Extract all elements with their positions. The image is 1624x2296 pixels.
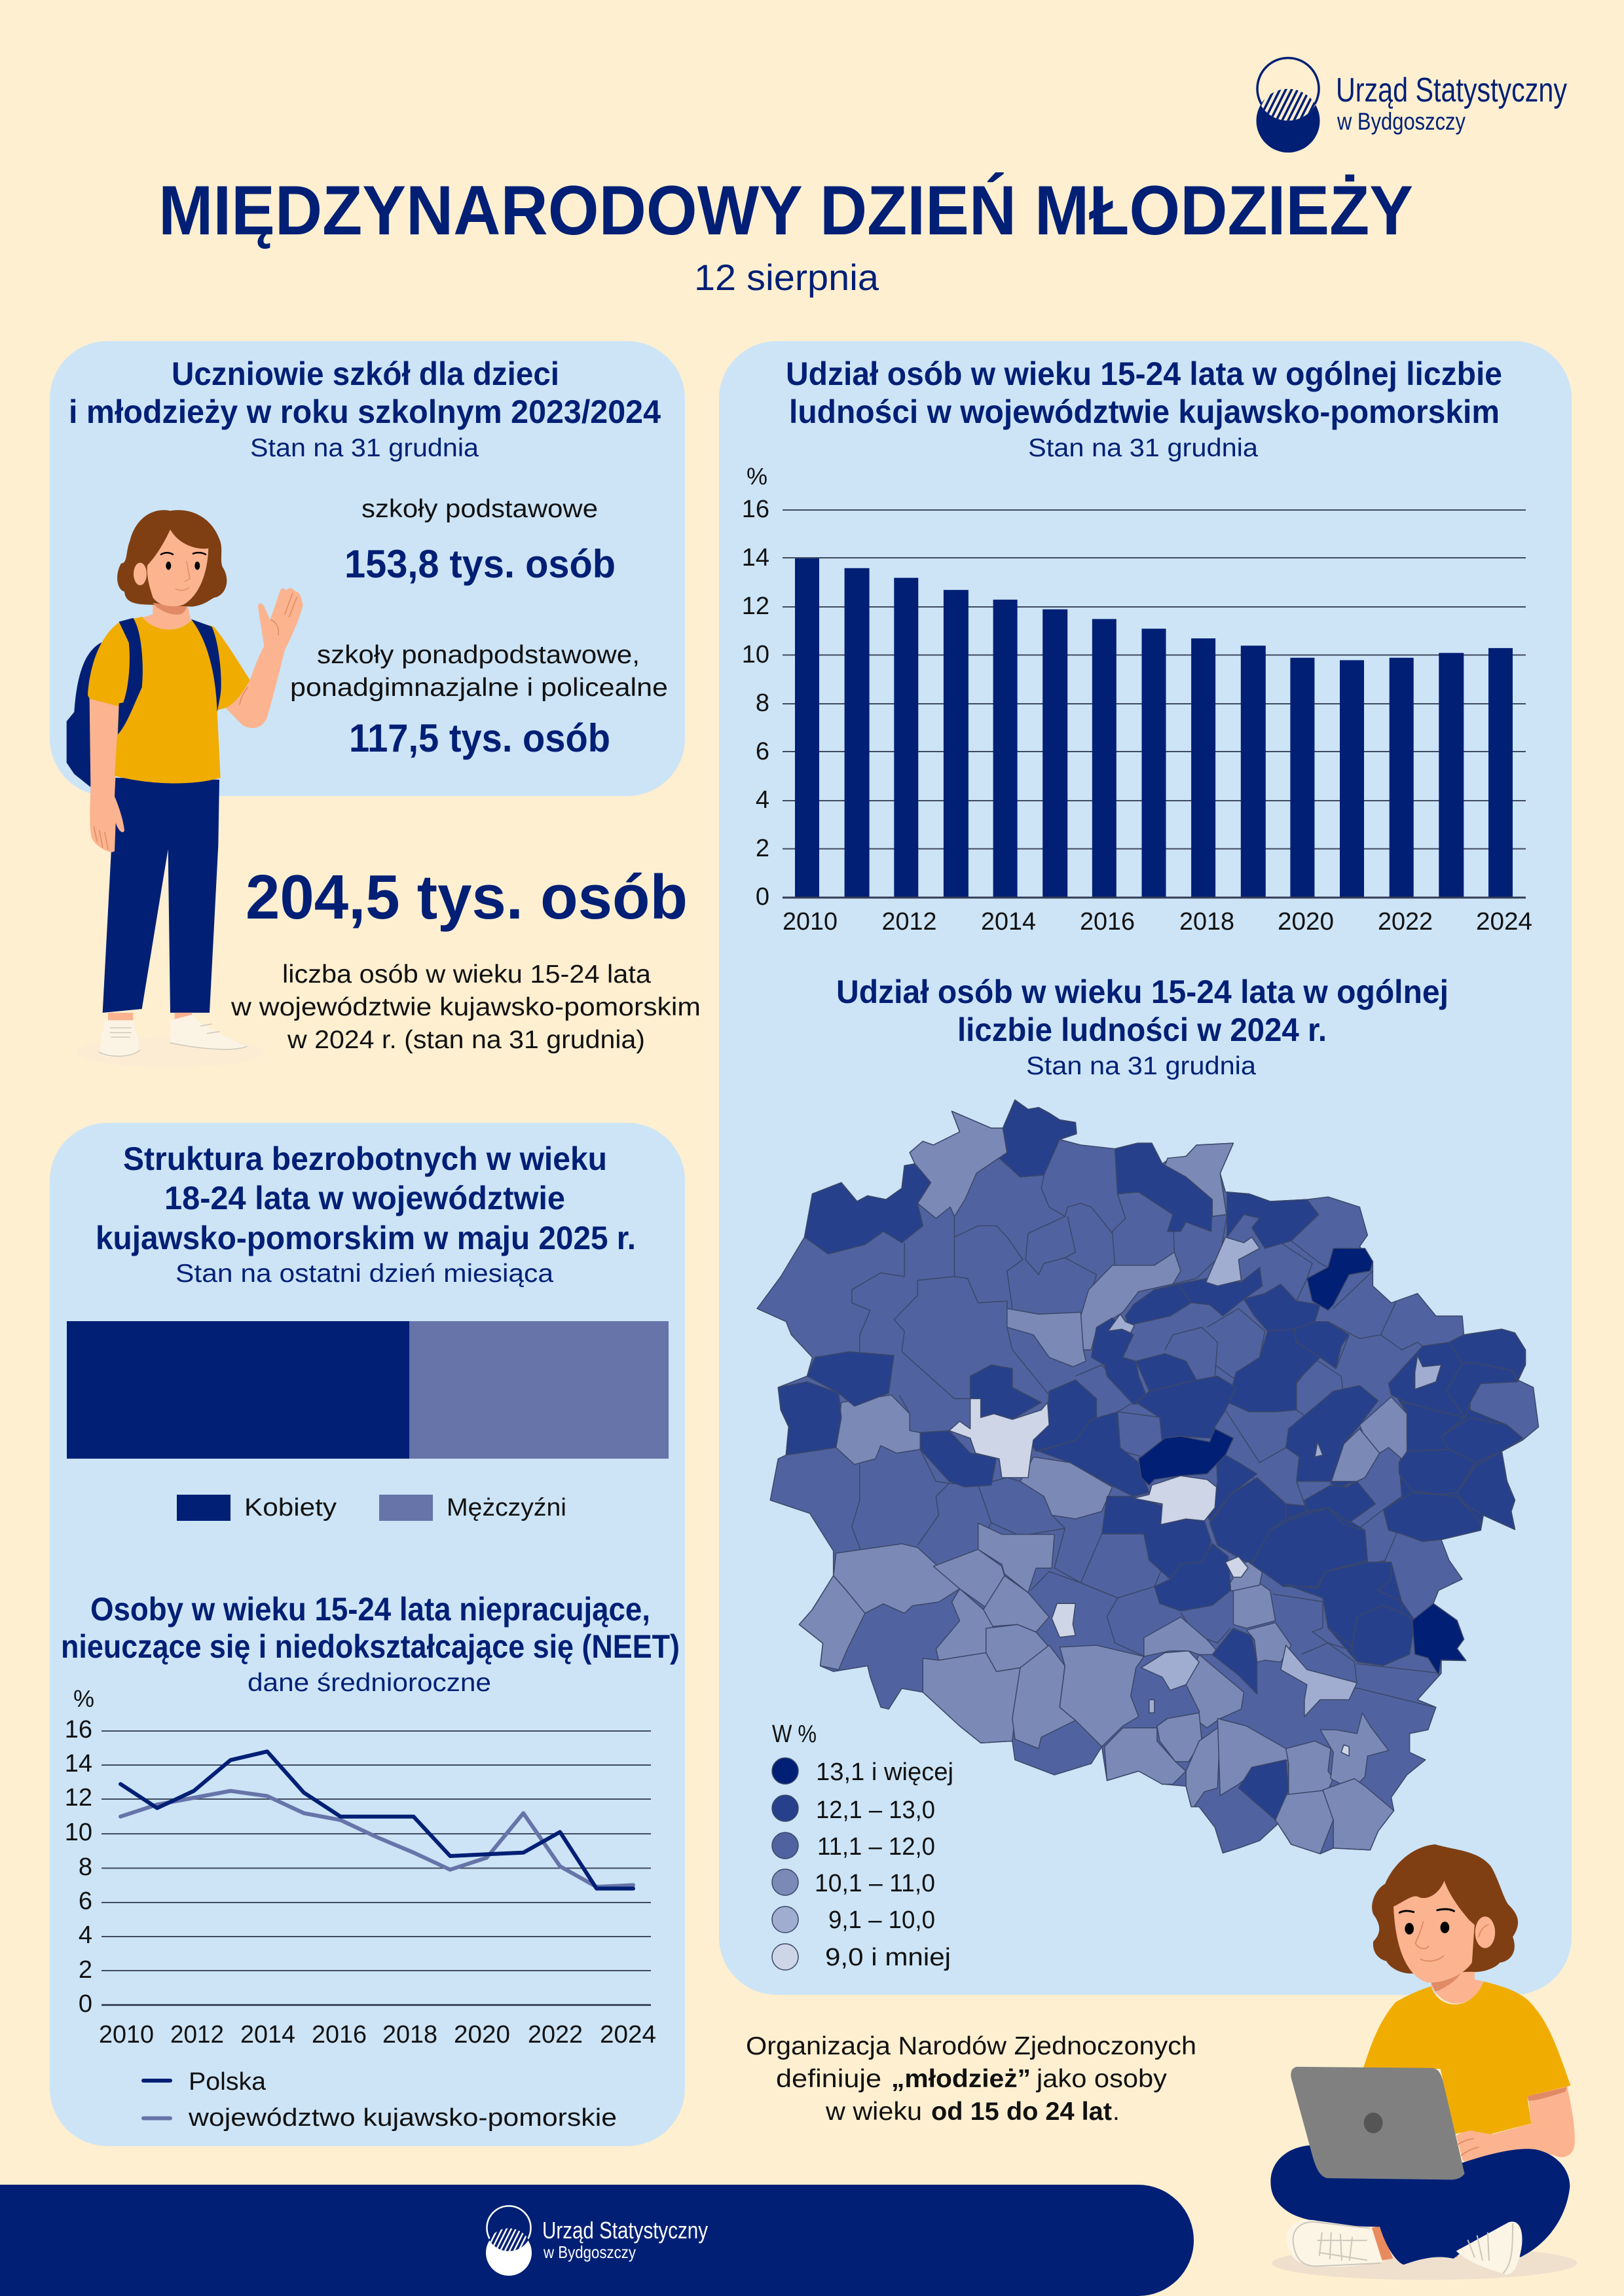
note: pupils date: Stan na 31 grudnia <box>250 434 479 462</box>
illustration: person with laptop <box>1270 1844 1578 2280</box>
bar chart: share of youth 2010-2024: 14 <box>742 544 769 572</box>
line chart: NEET: 2014 <box>240 2021 295 2049</box>
text: population description: liczba osób w wieku 15-24 lata <box>282 960 651 989</box>
text: UN definition of youth: . <box>1113 2098 1120 2126</box>
legend: NEET lines: województwo kujawsko-pomorskie <box>188 2104 617 2132</box>
heading: NEET: nieuczące się i niedokształcające się (NEET) <box>61 1628 680 1665</box>
legend: map classes: 9,0 i mniej <box>825 1944 951 1971</box>
line chart: NEET: 2012 <box>170 2021 224 2049</box>
heading: map: Udział osób w wieku 15-24 lata w ogólnej <box>836 974 1449 1010</box>
text: UN definition of youth: od 15 do 24 lat <box>931 2098 1112 2126</box>
text: UN definition of youth: „młodzież” <box>891 2065 1031 2093</box>
note: chart date: Stan na 31 grudnia <box>1028 434 1258 462</box>
bar chart: share of youth 2010-2024: 10 <box>742 641 769 668</box>
text: UN definition of youth: w wieku <box>825 2098 922 2126</box>
line chart: NEET: 2018 <box>382 2021 437 2049</box>
bar chart: share of youth 2010-2024: 8 <box>756 689 769 717</box>
bar chart: share of youth 2010-2024: % <box>747 463 767 490</box>
label: secondary schools <box>290 641 668 702</box>
logo: Urząd Statystyczny w Bydgoszczy <box>1242 58 1567 153</box>
heading: unemployment structure: 18-24 lata w województwie <box>164 1180 565 1216</box>
heading: unemployment structure: Struktura bezrobotnych w wieku <box>123 1140 607 1177</box>
bar chart: share of youth 2010-2024: 16 <box>742 496 769 523</box>
heading: pupils <box>69 355 661 430</box>
line chart: NEET: 8 <box>79 1853 92 1881</box>
bar chart: share of youth 2010-2024: 2018 <box>1179 908 1234 936</box>
big number: population aged 15-24: 204,5 tys. osób <box>246 862 688 932</box>
footer logo: w Bydgoszczy <box>543 2242 636 2262</box>
panel: unemployment and NEET <box>50 1123 685 2146</box>
line chart: NEET: 14 <box>65 1750 92 1777</box>
footer logo: Urząd Statystyczny <box>542 2217 708 2244</box>
legend: map classes: 13,1 i więcej <box>816 1758 953 1786</box>
heading: share of youth over time: Udział osób w wieku 15-24 lata w ogólnej liczbie <box>786 355 1502 392</box>
legend: NEET lines <box>143 2068 617 2132</box>
note: NEET data: dane średnioroczne <box>248 1669 491 1697</box>
legend: women and men: Mężczyźni <box>447 1494 566 1522</box>
panel: right column <box>719 341 1572 1995</box>
stacked bar: women and men <box>67 1321 669 1459</box>
line chart: NEET: 2010 <box>99 2021 154 2049</box>
bar chart: share of youth 2010-2024 <box>742 463 1532 936</box>
heading: share of youth over time: ludności w województwie kujawsko-pomorskim <box>789 393 1500 430</box>
line chart: NEET <box>65 1685 656 2049</box>
heading: unemployment structure: kujawsko-pomorskim w maju 2025 r. <box>96 1220 636 1256</box>
line chart: NEET: 4 <box>79 1922 92 1949</box>
heading: NEET: Osoby w wieku 15-24 lata niepracujące, <box>90 1591 650 1628</box>
heading: NEET <box>61 1591 680 1665</box>
footer logo <box>473 2206 708 2276</box>
label: secondary schools: szkoły ponadpodstawowe, <box>317 641 640 669</box>
bar chart: share of youth 2010-2024: 6 <box>756 738 769 765</box>
bar chart: share of youth 2010-2024: 2016 <box>1080 908 1135 936</box>
bar chart: share of youth 2010-2024: 2012 <box>881 908 936 936</box>
bar chart: share of youth 2010-2024: 0 <box>756 883 769 911</box>
text: UN definition of youth: jako osoby <box>1036 2065 1168 2093</box>
legend: map classes: 12,1 – 13,0 <box>816 1796 935 1824</box>
line chart: NEET: % <box>73 1685 94 1712</box>
text: population description: w 2024 r. (stan na 31 grudnia) <box>287 1026 645 1054</box>
heading: share of youth over time <box>786 355 1502 430</box>
line chart: NEET: 0 <box>79 1990 92 2018</box>
heading: pupils: Uczniowie szkół dla dzieci <box>172 355 559 392</box>
line chart: NEET: 10 <box>65 1819 92 1846</box>
panel: pupils <box>50 341 685 796</box>
text: population description <box>231 960 701 1054</box>
line chart: NEET: 2022 <box>528 2021 583 2049</box>
note: map date: Stan na 31 grudnia <box>1026 1052 1256 1080</box>
text: UN definition of youth: definiuje <box>776 2065 881 2093</box>
legend: women and men <box>177 1494 566 1522</box>
bar chart: share of youth 2010-2024: 2024 <box>1476 908 1532 936</box>
legend: map classes: W % <box>772 1721 817 1748</box>
illustration: student with backpack <box>67 510 303 1067</box>
map: share of youth by gmina <box>757 1100 1539 1854</box>
heading: unemployment structure <box>96 1140 636 1256</box>
line chart: NEET: 2024 <box>600 2021 656 2049</box>
bar chart: share of youth 2010-2024: 2022 <box>1378 908 1433 936</box>
line chart: NEET: 2020 <box>454 2021 510 2049</box>
legend: women and men: Kobiety <box>244 1494 337 1522</box>
heading: pupils: i młodzieży w roku szkolnym 2023/2024 <box>69 393 661 430</box>
footer bar <box>0 2185 1194 2296</box>
legend: map classes: 9,1 – 10,0 <box>828 1906 935 1934</box>
subtitle: date: 12 sierpnia <box>694 257 879 298</box>
text: population description: w województwie kujawsko-pomorskim <box>231 993 701 1021</box>
text: UN definition of youth: Organizacja Narodów Zjednoczonych <box>746 2032 1196 2060</box>
line chart: NEET: 12 <box>65 1784 92 1812</box>
logo: Urząd Statystyczny w Bydgoszczy: Urząd Statystyczny <box>1336 71 1567 109</box>
value: secondary schools: 117,5 tys. osób <box>349 716 610 760</box>
legend: map classes: 10,1 – 11,0 <box>815 1870 935 1897</box>
label: primary schools: szkoły podstawowe <box>361 495 598 523</box>
line chart: NEET: 2 <box>79 1956 92 1984</box>
label: secondary schools: ponadgimnazjalne i policealne <box>290 674 668 702</box>
heading: map: liczbie ludności w 2024 r. <box>957 1011 1327 1048</box>
legend: map classes: 11,1 – 12,0 <box>817 1833 935 1861</box>
bar chart: share of youth 2010-2024: 4 <box>756 786 769 814</box>
text: UN definition of youth <box>746 2032 1196 2126</box>
line chart: NEET: 16 <box>65 1716 92 1743</box>
bar chart: share of youth 2010-2024: 2020 <box>1278 908 1334 936</box>
title: MIĘDZYNARODOWY DZIEŃ MŁODZIEŻY <box>158 171 1413 249</box>
legend: NEET lines: Polska <box>189 2068 267 2096</box>
line chart: NEET: 6 <box>79 1887 92 1915</box>
line chart: NEET: 2016 <box>312 2021 367 2049</box>
note: unemployment date: Stan na ostatni dzień miesiąca <box>175 1260 553 1288</box>
legend: map classes <box>772 1721 953 1971</box>
logo: Urząd Statystyczny w Bydgoszczy: w Bydgoszczy <box>1337 108 1466 135</box>
bar chart: share of youth 2010-2024: 2010 <box>783 908 838 936</box>
heading: map <box>836 974 1449 1048</box>
bar chart: share of youth 2010-2024: 2014 <box>981 908 1036 936</box>
bar chart: share of youth 2010-2024: 12 <box>742 592 769 620</box>
bar chart: share of youth 2010-2024: 2 <box>756 835 769 862</box>
value: primary schools: 153,8 tys. osób <box>344 542 616 586</box>
